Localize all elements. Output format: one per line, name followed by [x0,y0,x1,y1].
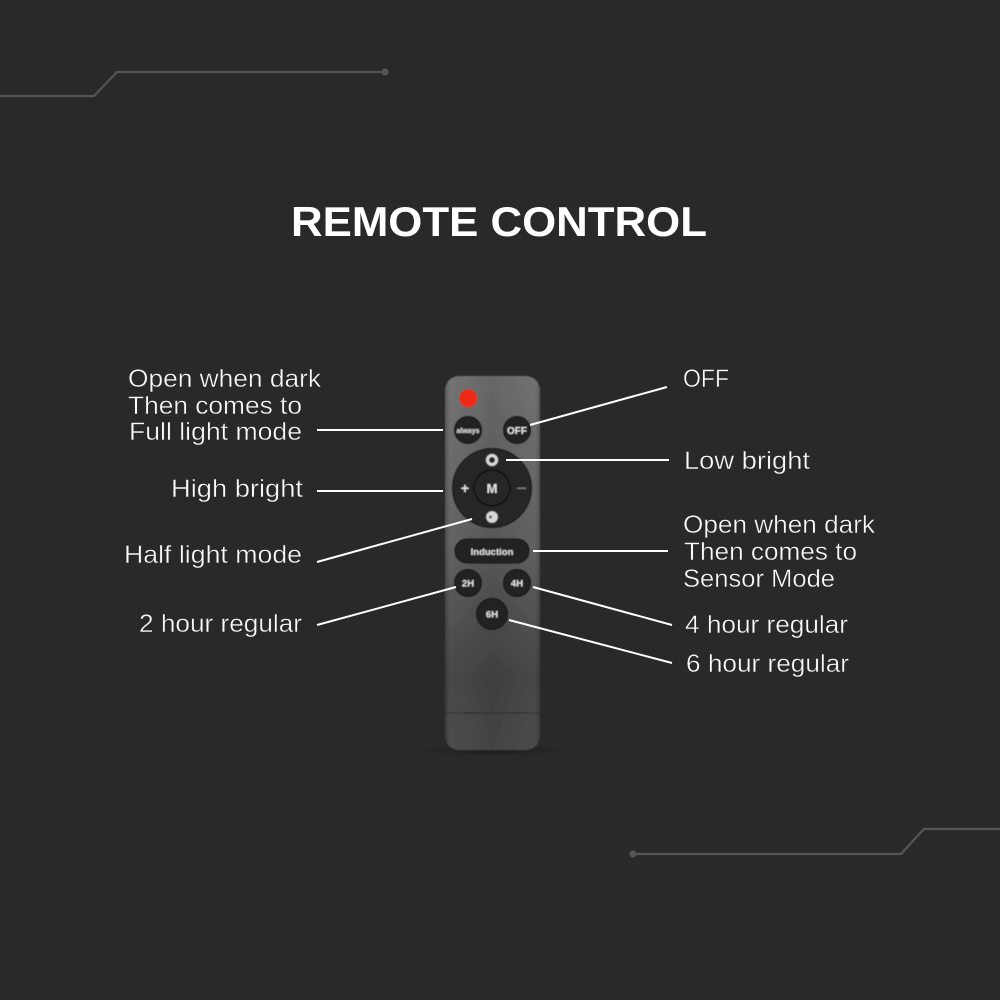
connector: low bright button [506,459,669,461]
right label: low bright: Low bright [684,447,810,475]
right label: 6 hour regular: 6 hour regular [686,650,849,678]
directional pad: + [461,480,469,496]
decorative circuit line: top left [0,68,389,96]
left label: full light mode [128,365,322,446]
left label: half light mode: Half light mode [124,541,302,569]
button: always [454,416,482,444]
right label: sensor mode [683,511,876,593]
button: 4H: 4H [511,578,523,590]
button: always: always [457,428,480,435]
connector: induction button [533,550,668,552]
directional pad [452,448,532,528]
connector: OFF button [530,387,667,425]
button: 6H: 6H [486,610,498,620]
button: 6H [476,598,508,630]
left label: full light mode: Open when dark [128,365,322,393]
button: OFF [504,416,530,444]
button: 2H [454,570,482,596]
button: 2H: 2H [462,578,474,590]
red power indicator [459,389,477,407]
right label: sensor mode: Then comes to [684,538,857,566]
remote control device [414,376,570,756]
button: 4H [504,570,530,596]
connector: 2H button [317,587,456,625]
right label: OFF: OFF [683,365,729,393]
title: REMOTE CONTROL [291,198,707,245]
connector: half light button [317,519,472,562]
remote shadow [414,744,570,756]
button: Induction [455,539,529,563]
connector: 4H button [533,587,672,625]
remote body [445,376,540,750]
left label: high bright: High bright [171,475,303,503]
button: Induction: Induction [471,547,514,558]
connector: plus button [317,490,443,492]
left label: 2 hour regular: 2 hour regular [139,610,302,638]
right label: sensor mode: Open when dark [683,511,876,539]
left label: full light mode: Full light mode [129,418,302,446]
right label: sensor mode: Sensor Mode [683,565,835,593]
decorative circuit line: bottom right [629,829,1000,858]
right label: 4 hour regular: 4 hour regular [685,611,848,639]
left label: full light mode: Then comes to [128,392,302,420]
button: OFF: OFF [507,426,527,437]
directional pad: M [487,481,497,496]
connector: always button [317,429,443,431]
connector: 6H button [509,620,672,663]
